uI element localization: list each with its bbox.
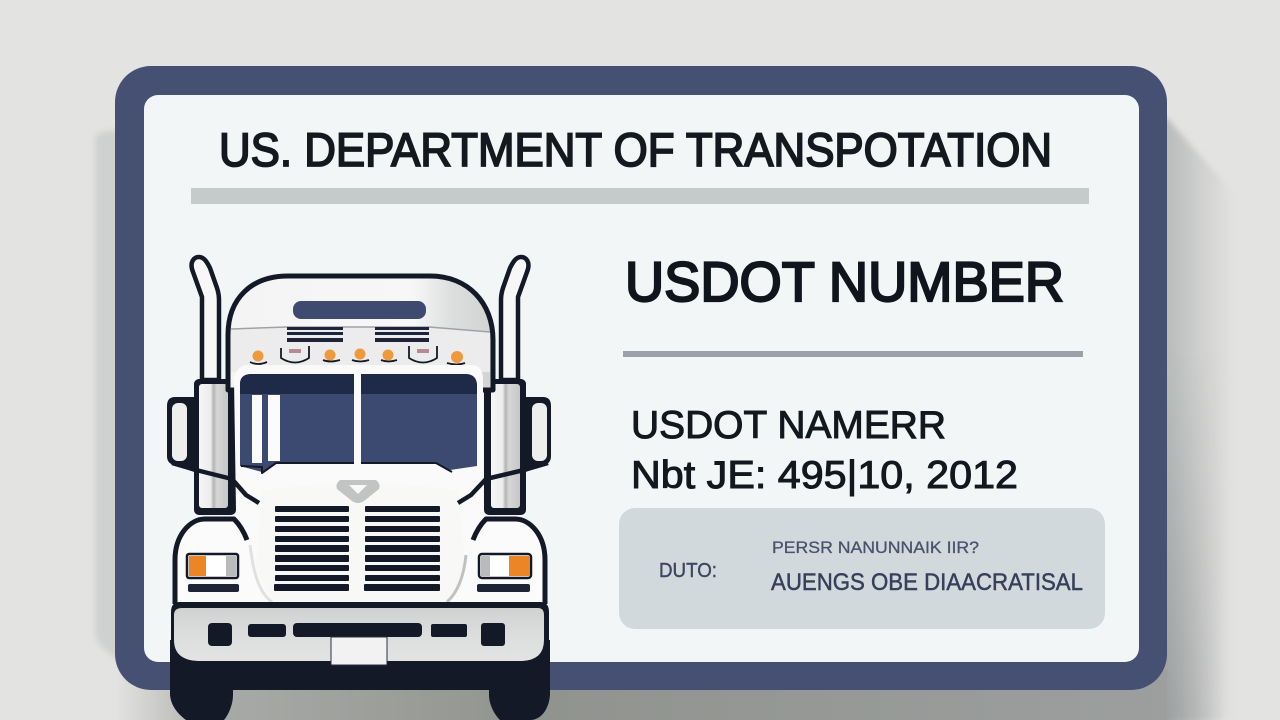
truck illustration: [167, 257, 551, 720]
info line two: AUENGS OBE DIAACRATISAL: [771, 569, 1083, 596]
cab roof: [228, 276, 493, 390]
marker lights: [250, 346, 465, 364]
info label: DUTO:: [659, 560, 717, 582]
right fender: [447, 519, 545, 604]
roof visor panel: [293, 301, 426, 319]
right air cleaner: [484, 379, 526, 515]
right mirror: [523, 397, 551, 473]
heading divider: [623, 351, 1083, 357]
bottom card shadow: [115, 670, 1167, 720]
card inner panel: [144, 95, 1139, 662]
info panel: [619, 508, 1105, 629]
bumper: [171, 602, 549, 665]
text: date line: Nbt JE: 495|10, 2012: [631, 454, 1018, 497]
right card shadow: [1163, 116, 1224, 720]
left exhaust stack: [192, 257, 219, 380]
title divider bar: [191, 188, 1089, 204]
heading: department title: US. DEPARTMENT OF TRANSPOTATION: [219, 123, 1052, 176]
left windshield: [240, 374, 354, 473]
wheels and undercarriage: [170, 640, 550, 720]
heading: USDOT number: USDOT NUMBER: [625, 250, 1064, 313]
right grille: [364, 506, 440, 591]
card frame: [115, 66, 1167, 690]
hood and cab front: [234, 365, 483, 604]
right exhaust stack: [501, 257, 528, 380]
text: USDOT name line: USDOT NAMERR: [631, 404, 946, 447]
left mirror: [167, 397, 197, 473]
right windshield: [361, 374, 477, 472]
left card shadow: [95, 130, 130, 670]
roof band: [231, 327, 490, 372]
hood center panel: [256, 484, 466, 600]
roof vents: [287, 327, 429, 342]
hood badge: [336, 480, 380, 503]
left air cleaner: [194, 379, 236, 515]
license plate: [331, 637, 387, 665]
left wiper strut: [172, 463, 259, 503]
right wiper strut: [458, 463, 548, 503]
right headlight: [477, 554, 531, 592]
left grille: [274, 506, 349, 591]
left fender: [175, 519, 272, 604]
left headlight: [187, 554, 239, 592]
info line one: PERSR NANUNNAIK IIR?: [772, 538, 979, 557]
